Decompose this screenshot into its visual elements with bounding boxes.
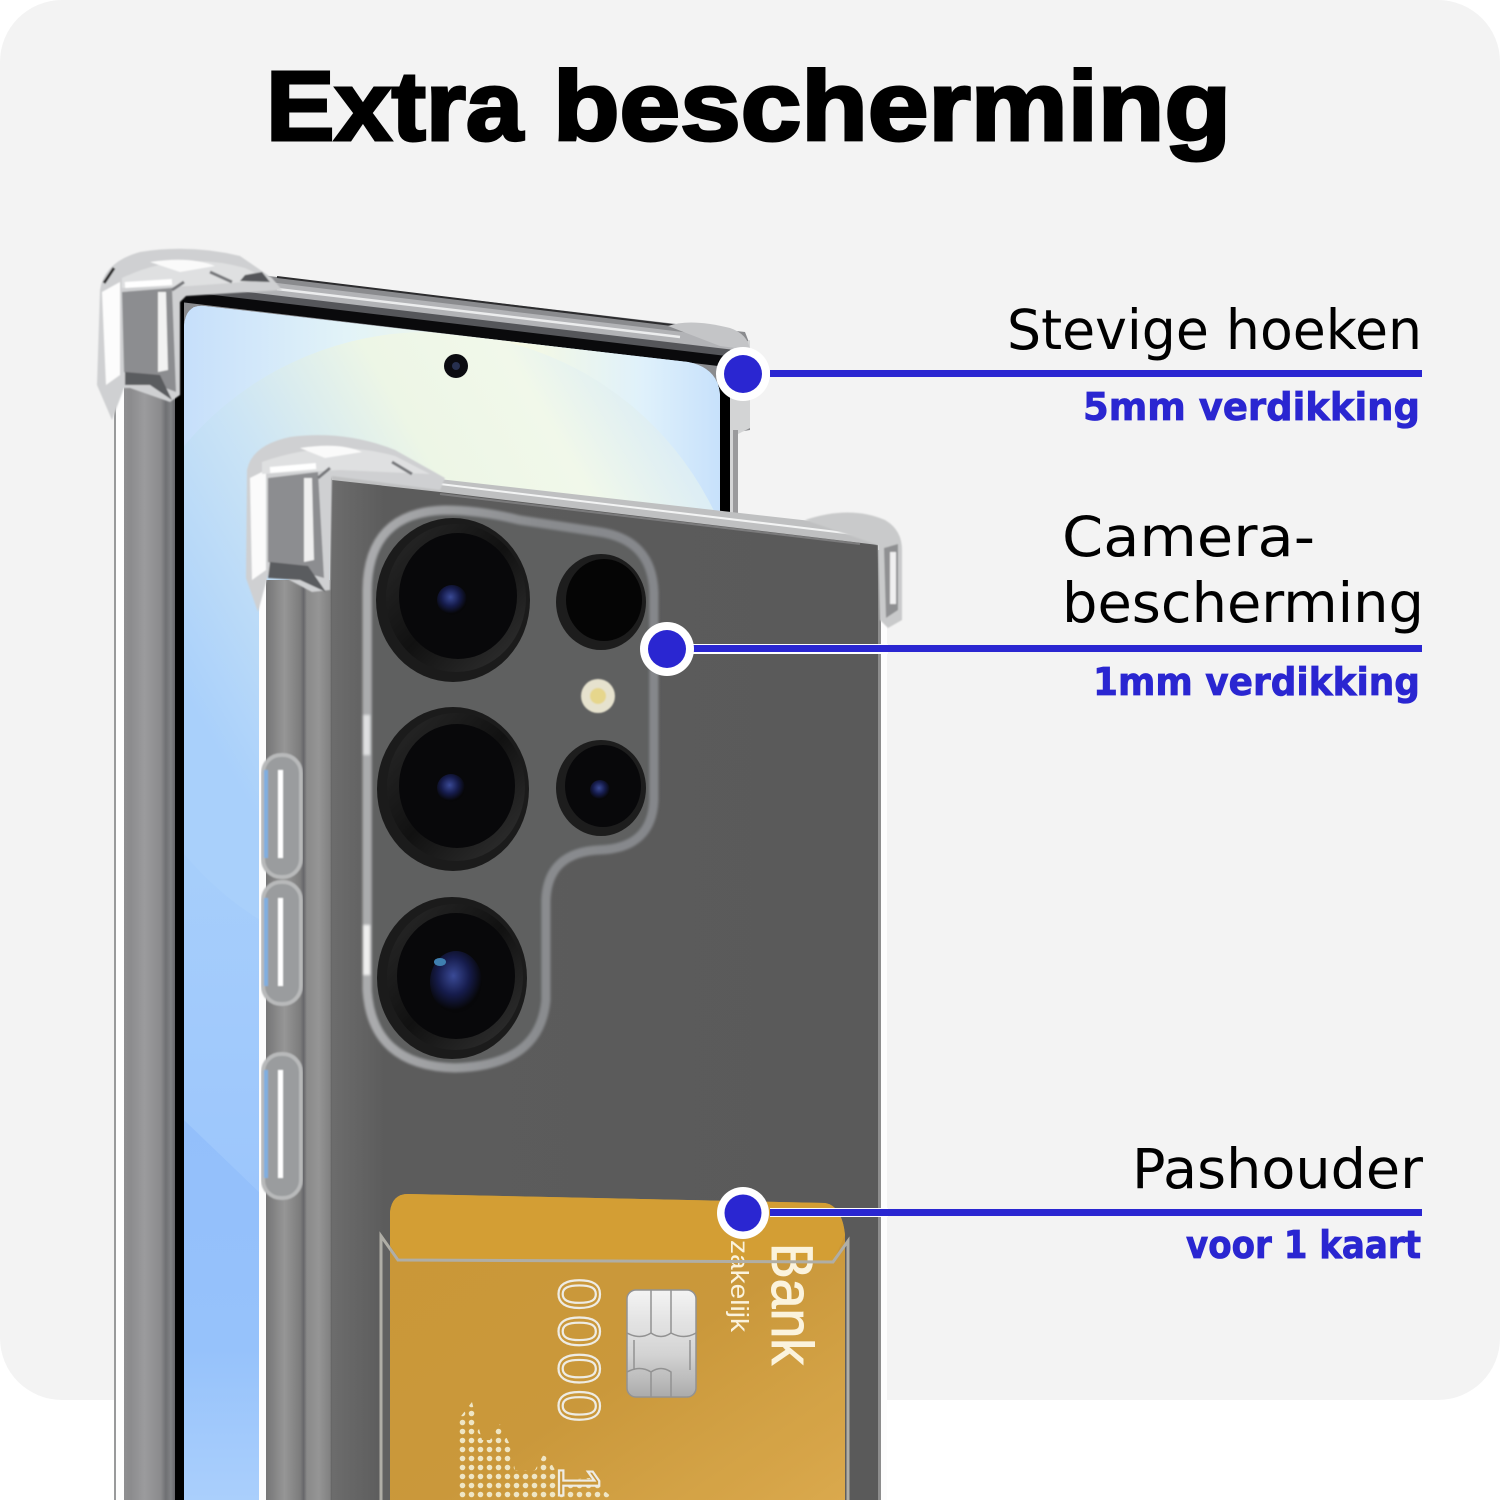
side button cutouts	[263, 755, 301, 1198]
card body	[390, 1194, 845, 1500]
flash	[581, 679, 615, 713]
leader line	[693, 644, 888, 654]
label: bescherming	[1062, 571, 1424, 635]
marker	[640, 622, 694, 676]
title: Extra	[266, 51, 525, 161]
marker	[716, 347, 770, 401]
top-left bumper	[246, 435, 445, 612]
card subtitle: zakelijk	[725, 1240, 753, 1333]
front camera	[444, 354, 468, 378]
top-left bumper	[97, 249, 282, 420]
leader line	[770, 1208, 888, 1217]
label: Pashouder	[1132, 1137, 1423, 1201]
left case column	[266, 580, 332, 1500]
small lens top	[556, 554, 646, 650]
right edge glint	[878, 550, 881, 1500]
callout: stevige hoeken	[716, 298, 1422, 429]
left case column	[114, 380, 116, 1500]
lens 3	[377, 897, 527, 1059]
back panel	[330, 472, 878, 1500]
top edge of case	[330, 470, 880, 545]
black bezel	[174, 300, 184, 1500]
screen	[184, 306, 720, 1500]
dot pattern	[458, 1402, 615, 1500]
white left line	[259, 560, 266, 1500]
title: bescherming	[553, 51, 1231, 161]
small lens bottom	[556, 740, 646, 836]
camera island	[363, 510, 654, 1068]
sublabel: voor 1 kaart	[1186, 1223, 1421, 1267]
callout: pashouder	[717, 1137, 1423, 1267]
right case edge	[718, 360, 736, 520]
card top band	[390, 1194, 845, 1262]
lens 1	[376, 518, 530, 682]
marker	[717, 1187, 769, 1239]
label: Camera-	[1062, 505, 1315, 569]
bank name: Bank	[759, 1243, 824, 1366]
callout: camerabescherming	[640, 505, 1424, 704]
chip	[627, 1290, 696, 1397]
case top edge	[120, 262, 750, 520]
leader line	[770, 370, 1422, 377]
label: Stevige hoeken	[1007, 298, 1422, 362]
phone back view	[246, 435, 902, 1500]
right top corner bumper	[805, 512, 902, 628]
card number: 0000	[546, 1278, 611, 1422]
lens 2	[377, 707, 529, 871]
phone front view	[97, 249, 750, 1500]
sublabel: 1mm verdikking	[1093, 660, 1420, 704]
bank card in pocket	[381, 1194, 848, 1500]
pocket outline	[381, 1236, 848, 1500]
sublabel: 5mm verdikking	[1083, 385, 1420, 429]
